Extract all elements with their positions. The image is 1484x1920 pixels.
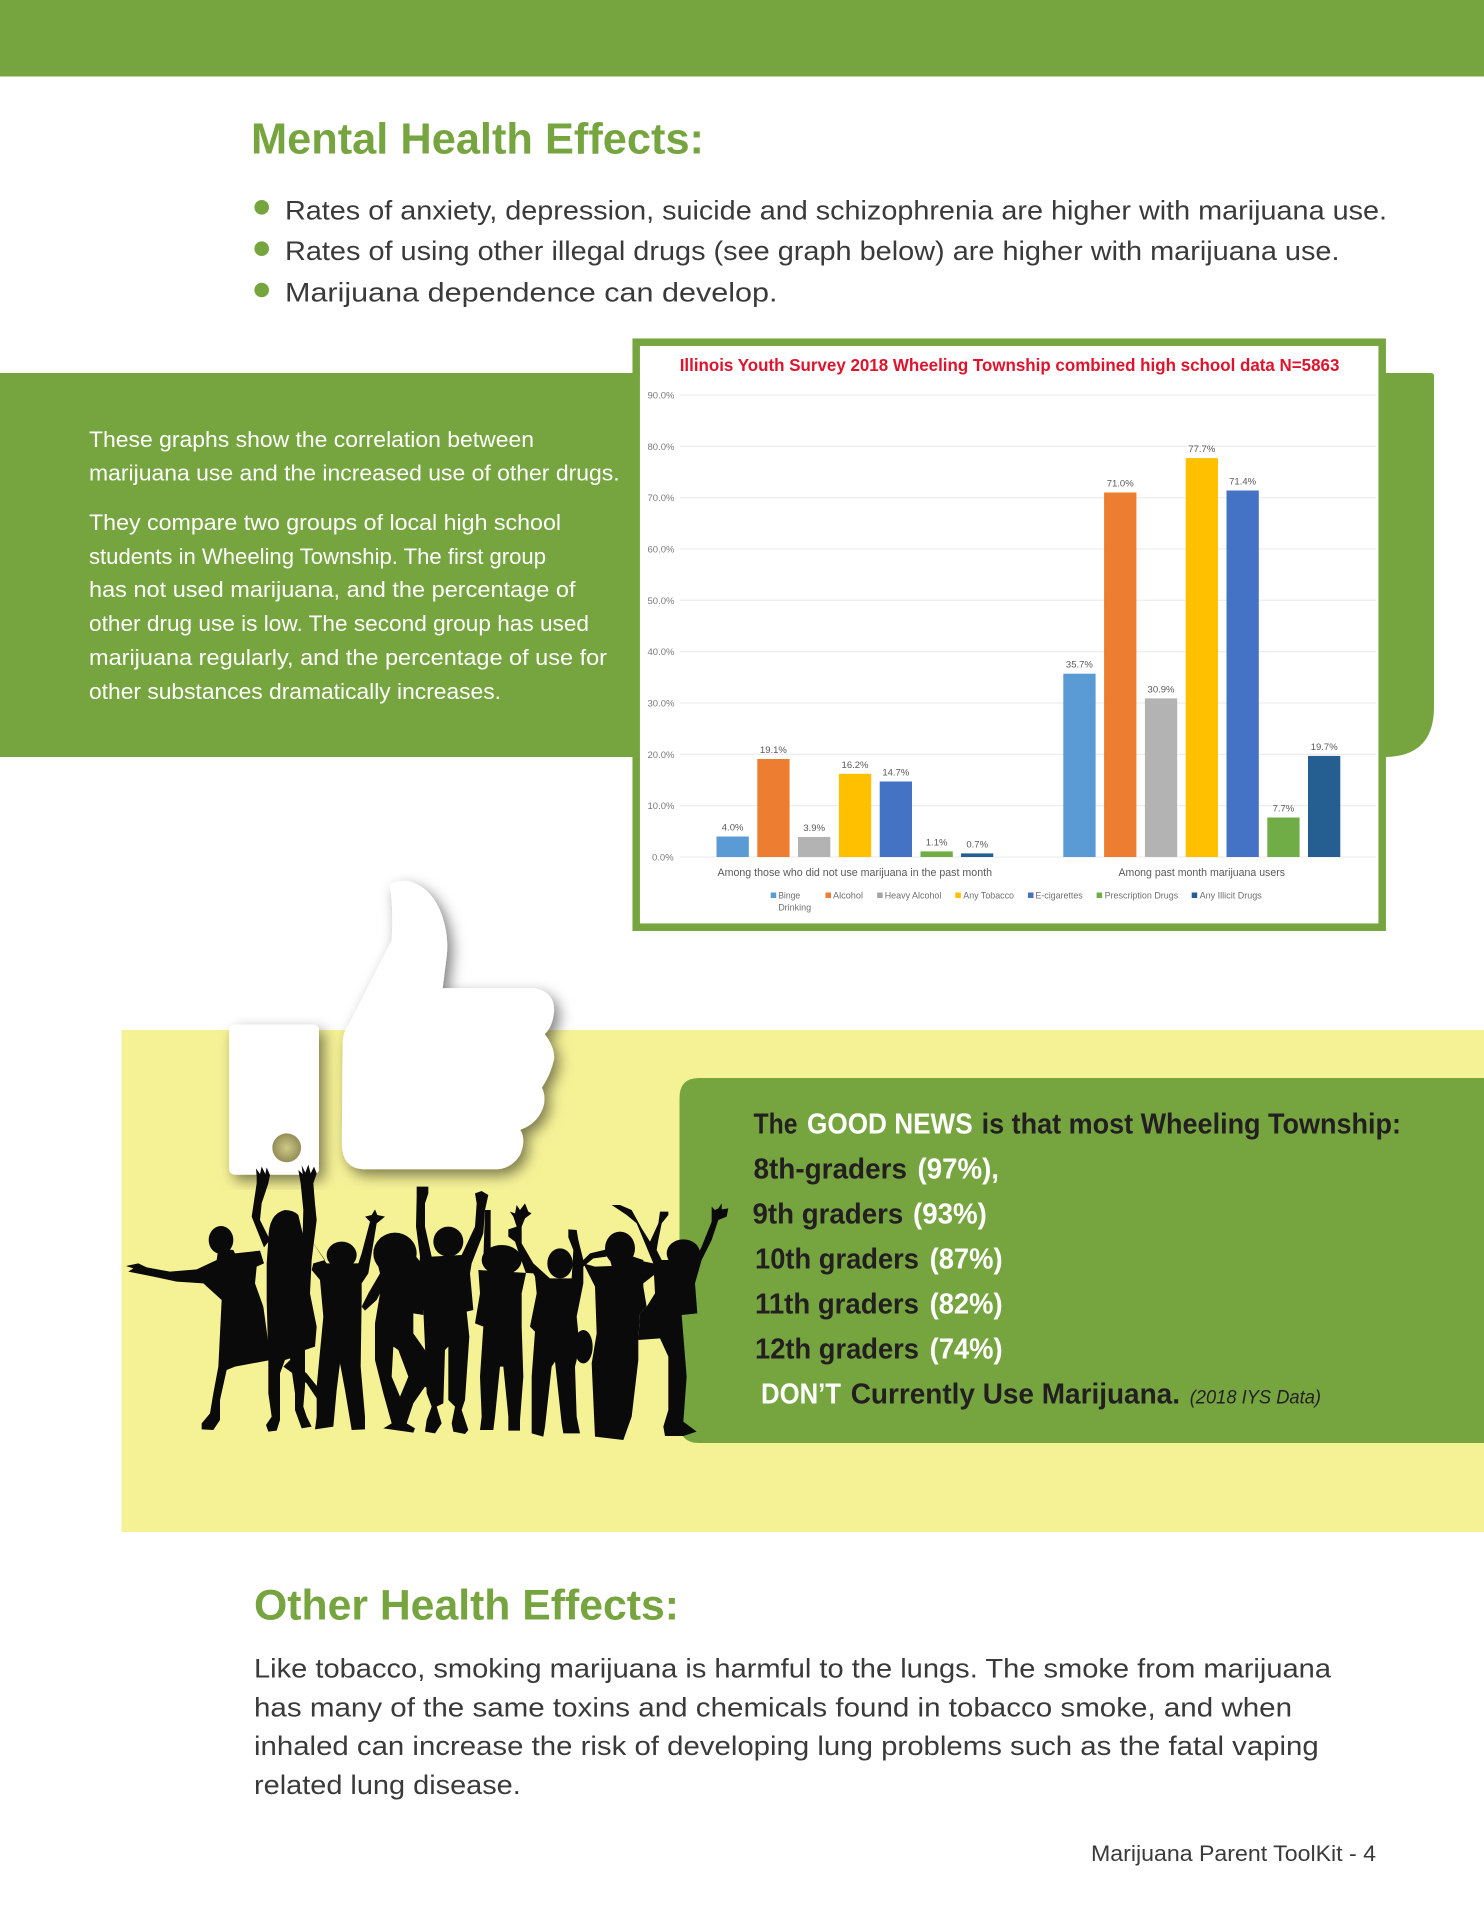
text block: graph explanation: other drug use is low. The second group has used — [89, 611, 589, 636]
y axis labels: 10.0% — [648, 801, 675, 812]
bar chart: Illinois Youth Survey — [636, 342, 1382, 927]
chart legend: Binge — [778, 890, 800, 902]
child 6 — [475, 1203, 552, 1431]
top banner — [0, 0, 1484, 76]
bars: did not use marijuana: 4.0% — [722, 822, 744, 834]
chart legend: Prescription Drugs — [1105, 890, 1178, 902]
text block: good news: (2018 IYS Data) — [1190, 1386, 1321, 1408]
y axis labels: 60.0% — [648, 544, 675, 556]
child 9 — [612, 1203, 728, 1436]
chart legend: Any Illicit Drugs — [1200, 890, 1262, 902]
y axis labels: 30.0% — [648, 698, 675, 710]
text block: good news: The — [754, 1108, 798, 1140]
chart legend: Any Tobacco — [963, 890, 1014, 902]
y axis labels: 20.0% — [648, 750, 675, 761]
bars: past month marijuana users: 30.9% — [1148, 684, 1175, 695]
text block: graph explanation: has not used marijuana, and the percentage of — [89, 577, 576, 602]
bars: past month marijuana users — [1063, 444, 1340, 857]
text block: good news: is that most Wheeling Township: — [982, 1108, 1401, 1140]
bars: did not use marijuana: 16.2% — [842, 760, 869, 771]
text block: other health effects: Like tobacco, smoking marijuana is harmful to the lungs. The smoke from marijuana — [254, 1654, 1331, 1684]
category labels — [718, 867, 1285, 879]
panel: yellow good news band — [122, 1030, 1484, 1532]
text block: good news: Currently Use Marijuana. — [851, 1378, 1180, 1410]
heading: other health effects: Other Health Effects: — [254, 1581, 679, 1629]
text block: good news: (87%) — [930, 1243, 1003, 1275]
y axis labels: 80.0% — [648, 442, 675, 453]
text block: other health effects: related lung disease. — [254, 1770, 521, 1800]
chart legend: Heavy Alcohol — [885, 890, 941, 902]
y axis labels: 70.0% — [648, 493, 675, 504]
bars: past month marijuana users: 77.7% — [1188, 444, 1216, 455]
silhouette: group of cheering children — [126, 1165, 728, 1440]
bars: did not use marijuana: 1.1% — [926, 837, 948, 848]
text block: good news: 12th graders — [755, 1333, 919, 1365]
bars: did not use marijuana: 0.7% — [966, 839, 989, 850]
text block: good news: (97%), — [918, 1153, 999, 1185]
y axis labels: 50.0% — [648, 596, 675, 607]
text block: graph explanation: These graphs show the correlation between — [89, 427, 534, 452]
bars: did not use marijuana: 19.1% — [760, 745, 787, 756]
y axis labels — [648, 390, 675, 864]
bars: past month marijuana users: 7.7% — [1273, 804, 1295, 814]
text block: graph explanation: marijuana use and the increased use of other drugs. — [89, 461, 620, 486]
text block: good news: (93%) — [913, 1198, 987, 1230]
category labels: Among past month marijuana users — [1118, 867, 1285, 879]
chart legend: E-cigarettes — [1035, 890, 1083, 902]
child 4 — [362, 1233, 430, 1433]
text block: graph explanation: They compare two groups of local high school — [89, 510, 561, 535]
text block: graph explanation: students in Wheeling Township. The first group — [89, 544, 546, 569]
panel: green band behind chart — [0, 373, 1434, 757]
text block: good news: GOOD NEWS — [807, 1108, 973, 1140]
bars: past month marijuana users: 71.0% — [1107, 478, 1134, 490]
bullet list: mental health effects — [254, 195, 1387, 308]
child 1 — [126, 1226, 271, 1430]
text block: good news: 10th graders — [755, 1243, 919, 1275]
child 5 — [416, 1187, 488, 1434]
text block: other health effects — [254, 1654, 1331, 1800]
text block: good news: 11th graders — [755, 1288, 919, 1320]
icon: thumbs up — [229, 881, 554, 1175]
children 1 to 4 — [126, 1165, 430, 1433]
text block: other health effects: inhaled can increase the risk of developing lung problems such as the fatal vaping — [254, 1731, 1319, 1761]
text block: good news: (82%) — [930, 1288, 1003, 1320]
child 8 — [583, 1232, 647, 1440]
child 7 — [530, 1229, 607, 1437]
bullet list: mental health effects: Marijuana dependence can develop. — [285, 278, 778, 308]
bars: did not use marijuana — [716, 745, 993, 857]
footer page label: Marijuana Parent ToolKit - 4 — [1091, 1841, 1376, 1866]
bullet list: mental health effects: Rates of using other illegal drugs (see graph below) are higher with marijuana use. — [285, 236, 1340, 266]
child 3 — [310, 1209, 385, 1430]
child 2 — [252, 1165, 320, 1432]
text block: good news: 9th graders — [752, 1198, 903, 1230]
text block: good news: (74%) — [930, 1333, 1003, 1365]
text block: good news: DON’T — [761, 1378, 842, 1410]
icon: thumb cuff button hole — [272, 1133, 301, 1162]
chart legend: Alcohol — [833, 890, 863, 902]
bars: past month marijuana users: 19.7% — [1311, 742, 1338, 753]
text block: other health effects: has many of the same toxins and chemicals found in tobacco smoke, and when — [254, 1693, 1292, 1723]
text block: good news: 8th-graders — [754, 1153, 907, 1185]
chart legend — [771, 890, 1262, 914]
text block: good news — [752, 1108, 1401, 1410]
chart title: Illinois Youth Survey 2018 Wheeling Township combined high school data N=5863 — [680, 355, 1340, 375]
bars: past month marijuana users: 71.4% — [1229, 476, 1257, 488]
panel: green good news box — [680, 1078, 1484, 1443]
text block: graph explanation: other substances dramatically increases. — [89, 679, 501, 704]
y axis labels: 90.0% — [648, 390, 675, 402]
chart legend: Drinking — [778, 902, 811, 914]
bars: past month marijuana users: 35.7% — [1066, 660, 1093, 671]
y axis labels: 40.0% — [648, 647, 675, 658]
category labels: Among those who did not use marijuana in the past month — [718, 867, 992, 879]
bars: did not use marijuana: 14.7% — [882, 768, 910, 778]
text block: graph explanation: marijuana regularly, and the percentage of use for — [89, 645, 608, 670]
y axis labels: 0.0% — [652, 852, 674, 864]
bars: did not use marijuana: 3.9% — [803, 823, 826, 834]
text block: graph explanation — [89, 427, 620, 704]
children 5 to 9 — [416, 1187, 728, 1440]
bullet list: mental health effects: Rates of anxiety, depression, suicide and schizophrenia are higher with marijuana use. — [285, 195, 1387, 225]
heading: mental health effects: Mental Health Effects: — [251, 114, 704, 164]
